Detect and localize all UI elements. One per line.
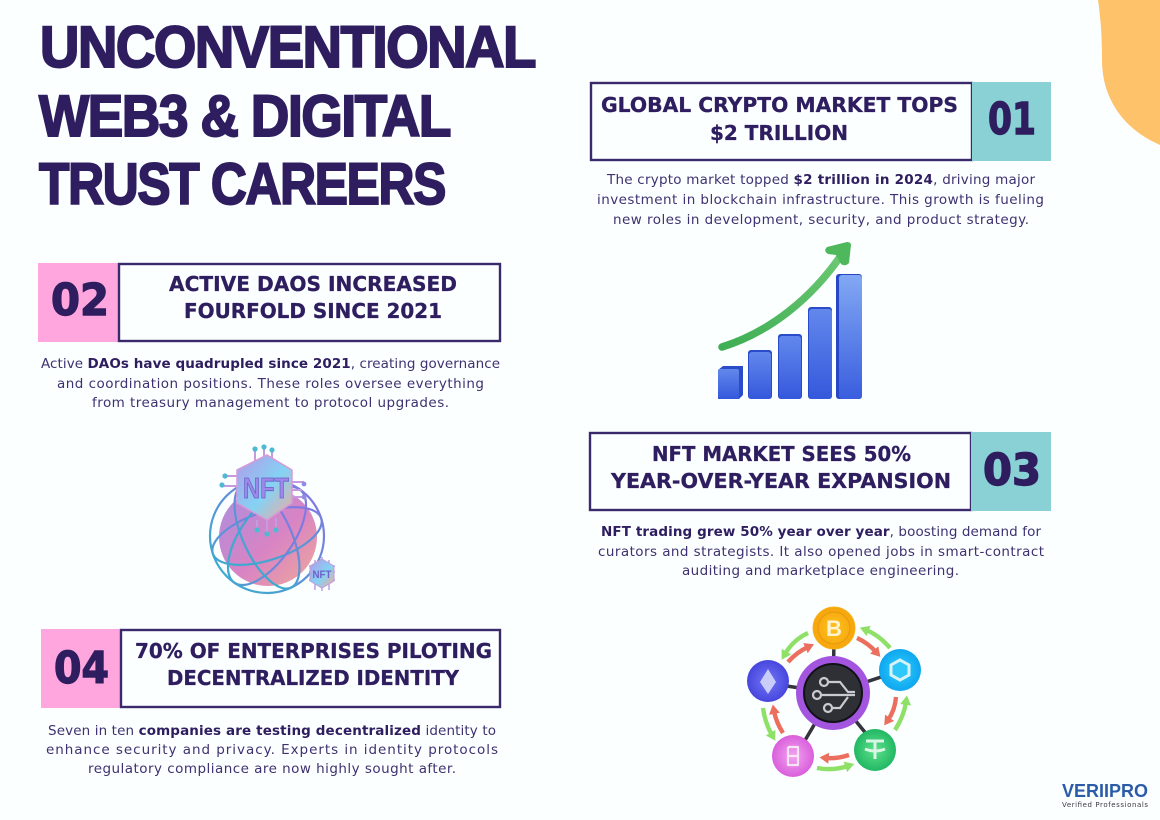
title [39,15,535,217]
icon: rising bar chart with arrow [718,242,862,399]
number badge 01 [972,82,1051,161]
heading box 03 [590,433,971,510]
text block 04: Seven in ten companies are testing decentralized identity to [48,723,496,739]
heading box 01: $2 TRILLION [710,121,848,145]
logo: Veriipro: VERIIPRO [1062,780,1148,801]
heading box 01: GLOBAL CRYPTO MARKET TOPS [601,93,958,117]
decorative orange blob [1098,0,1160,145]
title: UNCONVENTIONAL [40,15,535,80]
text block 02 [41,356,500,411]
heading box 02 [119,264,500,341]
text block 03: curators and strategists. It also opened jobs in smart-contract [598,544,1044,560]
icon: crypto network cycle [747,607,921,777]
title: TRUST CAREERS [39,152,445,217]
number badge 03 [971,432,1051,511]
heading box 02: ACTIVE DAOS INCREASED [169,272,457,296]
panel: 02 active DAOs [38,263,500,598]
heading box 03: NFT MARKET SEES 50% [652,442,911,466]
panel: 03 NFT market [590,432,1051,777]
heading box 04: DECENTRALIZED IDENTITY [167,666,460,690]
number badge 02: 02 [51,275,109,326]
heading box 01 [591,83,972,160]
number badge 03: 03 [983,445,1041,496]
logo: Veriipro: Verified Professionals [1062,801,1148,809]
text block 01 [597,172,1044,228]
text block 04: enhance security and privacy. Experts in identity protocols [46,742,498,758]
heading box 03: YEAR-OVER-YEAR EXPANSION [610,469,951,493]
text block 03: auditing and marketplace engineering. [682,563,959,579]
text block 04 [46,723,498,777]
panel: 04 decentralized identity [41,629,500,777]
text block 01: new roles in development, security, and product strategy. [613,212,1029,228]
icon: NFT globe: NFT [243,473,289,505]
coin: polygon [772,735,814,777]
text block 03: NFT trading grew 50% year over year, boosting demand for [601,524,1041,540]
text block 01: The crypto market topped $2 trillion in 2024, driving major [606,172,1035,188]
text block 04: regulatory compliance are now highly sought after. [88,761,456,777]
panel: 01 global crypto market [591,82,1051,399]
text block 02: and coordination positions. These roles oversee everything [57,376,484,392]
icon: NFT globe [205,444,335,598]
number badge 01: 01 [988,94,1036,145]
heading box 04: 70% OF ENTERPRISES PILOTING [135,639,492,663]
heading box 04 [121,630,500,707]
center node [796,656,870,730]
number badge 02 [38,263,119,342]
coin: tether [854,729,896,771]
coin: chainlink [879,649,921,691]
number badge 04 [41,629,121,708]
coin: ethereum [747,660,789,702]
coin: bitcoin: B [826,616,842,641]
text block 03 [598,524,1044,579]
title: WEB3 & DIGITAL [39,84,450,149]
text block 01: investment in blockchain infrastructure. This growth is fueling [597,192,1044,208]
text block 02: Active DAOs have quadrupled since 2021, creating governance [41,356,500,372]
text block 02: from treasury management to protocol upgrades. [92,395,449,411]
coin: bitcoin [813,607,855,649]
heading box 02: FOURFOLD SINCE 2021 [184,299,442,323]
icon: NFT globe: NFT [312,569,332,581]
number badge 04: 04 [54,643,109,694]
